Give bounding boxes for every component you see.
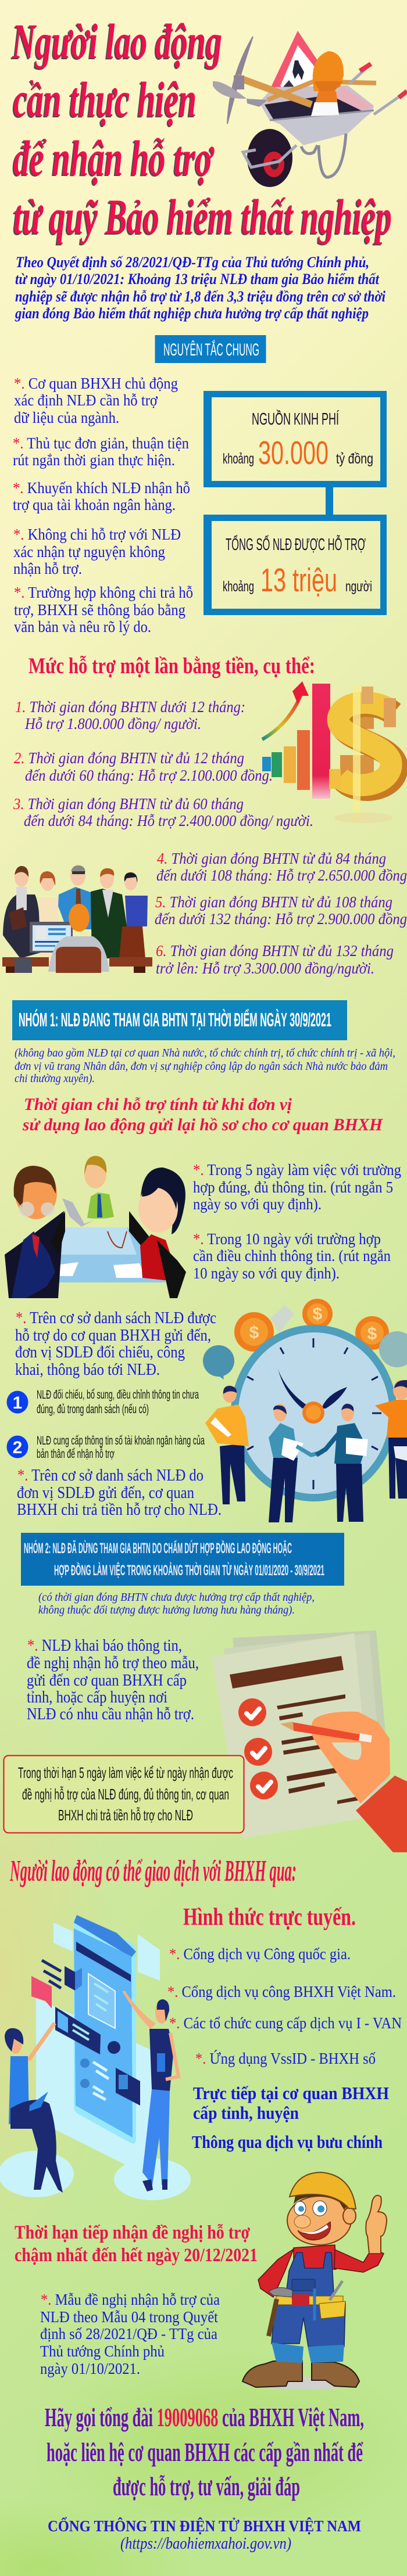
text: direct and postal channels: Trực tiếp tại cơ quan BHXH bbox=[193, 2083, 389, 2103]
text: worker declaration: *. NLĐ khai báo thông tin, bbox=[27, 1636, 182, 1655]
funding source figure: 30.000 bbox=[258, 434, 329, 472]
funding source figure: NGUỒN KINH PHÍ bbox=[252, 409, 340, 429]
note: group 1 exclusions: đơn vị vũ trang Nhân dân, đơn vị sự nghiệp công lập do ngân sách Nhà nước bảo đảm bbox=[15, 1060, 388, 1073]
illustration: checklist and hand bbox=[212, 1630, 407, 1852]
heading: support levels: Mức hỗ trợ một lần bằng tiền, cụ thể: bbox=[28, 653, 315, 678]
list: processing time: ngày so với quy định). bbox=[193, 1195, 322, 1213]
heading: payment time: sử dụng lao động gửi lại hồ sơ cho cơ quan BHXH bbox=[22, 1115, 384, 1134]
list: processing time: 10 ngày so với quy định). bbox=[193, 1264, 340, 1282]
list: support levels 1-3: 1. Thời gian đóng BHTN dưới 12 tháng: bbox=[15, 698, 245, 716]
numbered step 2 bbox=[7, 1434, 205, 1461]
funding source figure: tỷ đồng bbox=[336, 451, 373, 467]
callout: five working days bbox=[3, 1755, 244, 1833]
beneficiaries figure bbox=[223, 534, 372, 599]
text: request form: NLĐ theo Mẫu 04 trong Quyết bbox=[40, 2308, 218, 2326]
list: support levels 1-3 bbox=[13, 698, 313, 829]
list: support levels 4-6: 5. Thời gian đóng BHTN từ đủ 108 tháng bbox=[155, 893, 392, 911]
title bbox=[12, 13, 392, 245]
note: group 1 exclusions: chi thường xuyên). bbox=[15, 1072, 95, 1085]
beneficiaries figure: người bbox=[345, 579, 372, 595]
call to action bbox=[45, 2402, 364, 2501]
illustration: phone app with users bbox=[0, 1915, 191, 2200]
text: request form bbox=[40, 2291, 220, 2377]
callout: five working days: Trong thời hạn 5 ngày làm việc kể từ ngày nhận được bbox=[18, 1764, 233, 1781]
text: BHXH payment: đơn vị SDLĐ gửi đến, cơ quan bbox=[17, 1483, 194, 1502]
list: online channels: *. Ứng dụng VssID - BHXH số bbox=[195, 2050, 376, 2067]
text: worker declaration: gửi đến cơ quan BHXH cấp bbox=[27, 1671, 187, 1690]
list: general principles: *. Không chi hỗ trợ với NLĐ bbox=[13, 526, 181, 543]
numbered step 1: 1 bbox=[13, 1393, 22, 1413]
text: employer review bbox=[15, 1309, 216, 1379]
list: general principles: xác nhận tự nguyện không bbox=[13, 543, 165, 561]
list: support levels 1-3: đến dưới 60 tháng: Hỗ trợ 2.100.000 đồng. bbox=[25, 767, 273, 784]
list: general principles: *. Thủ tục đơn giản, thuận tiện bbox=[13, 434, 189, 452]
text: worker declaration bbox=[27, 1636, 199, 1723]
heading: deadline bbox=[15, 2222, 258, 2266]
text: employer review: hỗ trợ do cơ quan BHXH gửi đến, bbox=[15, 1326, 211, 1345]
text: BHXH payment: BHXH chi trả tiền hỗ trợ cho NLĐ. bbox=[17, 1500, 222, 1519]
numbered step 1: NLĐ đối chiếu, bổ sung, điều chỉnh thông tin chưa bbox=[37, 1388, 199, 1402]
title: để nhận hỗ trợ bbox=[13, 130, 215, 186]
illustration: construction worker thumbs up bbox=[242, 2172, 387, 2390]
icon: wheelbarrow with tools bbox=[213, 31, 407, 187]
callout: five working days: BHXH chi trả tiền hỗ trợ cho NLĐ bbox=[58, 1806, 193, 1824]
list: general principles: xác định NLĐ cần hỗ trợ bbox=[14, 391, 158, 409]
footer: source: (https://baohiemxahoi.gov.vn) bbox=[120, 2535, 291, 2553]
numbered step 1: đúng, đủ trong danh sách (nếu có) bbox=[37, 1403, 149, 1416]
text: employer review: *. Trên cơ sở danh sách NLĐ được bbox=[16, 1309, 216, 1327]
text: worker declaration: đề nghị nhận hỗ trợ theo mẫu, bbox=[27, 1654, 199, 1672]
text: request form: Thủ tướng Chính phủ bbox=[40, 2343, 165, 2360]
beneficiaries figure: 13 triệu bbox=[260, 562, 337, 599]
list: support levels 1-3: 2. Thời gian đóng BHTN từ đủ 12 tháng bbox=[14, 749, 244, 767]
list: general principles: nhận hỗ trợ. bbox=[13, 560, 82, 577]
text: employer review: khai, thông báo tới NLĐ. bbox=[15, 1360, 160, 1379]
list: support levels 1-3: đến dưới 84 tháng: Hỗ trợ 2.400.000 đồng/ người. bbox=[24, 812, 313, 829]
heading: deadline: Thời hạn tiếp nhận đề nghị hỗ trợ bbox=[15, 2222, 251, 2243]
list: support levels 4-6: 4. Thời gian đóng BHTN từ đủ 84 tháng bbox=[157, 850, 386, 867]
heading: payment time bbox=[22, 1095, 384, 1134]
text: direct and postal channels bbox=[192, 2083, 389, 2152]
list: general principles: trợ qua tài khoản ngân hàng. bbox=[13, 496, 176, 513]
list: general principles: dữ liệu của ngành. bbox=[14, 409, 119, 426]
list: support levels 4-6: 6. Thời gian đóng BHTN từ đủ 132 tháng bbox=[156, 942, 394, 960]
text: worker declaration: tỉnh, hoặc cấp huyện nơi bbox=[27, 1688, 167, 1706]
list: support levels 4-6: trở lên: Hỗ trợ 3.300.000 đồng/người. bbox=[156, 960, 374, 977]
heading bar: group 1 bbox=[12, 1000, 347, 1040]
heading bar: group 2 bbox=[21, 1533, 344, 1586]
list: online channels bbox=[167, 1945, 402, 2067]
text: BHXH payment: *. Trên cơ sở danh sách NLĐ do bbox=[17, 1466, 204, 1485]
numbered step 1 bbox=[7, 1388, 199, 1416]
list: processing time: cần điều chỉnh thông tin. (rút ngắn bbox=[193, 1247, 391, 1264]
list: general principles: văn bản và nêu rõ lý do. bbox=[14, 618, 151, 635]
text: request form: định số 28/2021/QĐ - TTg của bbox=[40, 2325, 217, 2343]
note: group 1 exclusions bbox=[15, 1047, 395, 1085]
heading button: general principles bbox=[155, 335, 266, 363]
illustration: clock, coins and people: $ bbox=[313, 1305, 323, 1324]
text: BHXH payment bbox=[17, 1466, 222, 1519]
illustration: clock, coins and people bbox=[203, 1299, 407, 1522]
list: processing time: *. Trong 10 ngày với trường hợp bbox=[193, 1230, 381, 1248]
note: group 2 conditions bbox=[38, 1591, 315, 1616]
text: employer review: đơn vị SDLĐ đối chiếu, công bbox=[15, 1343, 185, 1361]
note: group 2 conditions: không thuộc đối tượng được hưởng lương hưu hàng tháng). bbox=[38, 1604, 295, 1616]
icon: growth chart and dollar sign bbox=[262, 681, 396, 823]
list: general principles: *. Cơ quan BHXH chủ động bbox=[14, 375, 178, 392]
heading button: general principles: NGUYÊN TẮC CHUNG bbox=[163, 340, 259, 360]
list: general principles bbox=[13, 375, 193, 635]
heading: online form: Hình thức trực tuyến. bbox=[183, 1904, 356, 1931]
illustration: office team at desk bbox=[2, 865, 152, 973]
title: cần thực hiện bbox=[13, 71, 197, 127]
numbered step 2: bản thân để nhận hỗ trợ bbox=[37, 1447, 115, 1461]
list: processing time bbox=[193, 1161, 401, 1282]
illustration: clock, coins and people: $ bbox=[249, 1323, 259, 1342]
illustration: meeting at table bbox=[5, 1156, 186, 1298]
numbered step 2: NLĐ cung cấp thông tin số tài khoản ngân hàng của bbox=[37, 1434, 205, 1447]
text: request form: *. Mẫu đề nghị nhận hỗ trợ của bbox=[41, 2291, 220, 2308]
list: support levels 1-3: 3. Thời gian đóng BHTN từ đủ 60 tháng bbox=[13, 795, 244, 813]
list: online channels: *. Cổng dịch vụ Công quốc gia. bbox=[169, 1945, 351, 1963]
list: support levels 1-3: Hỗ trợ 1.800.000 đồng/ người. bbox=[24, 715, 201, 732]
funding source figure bbox=[223, 409, 373, 472]
list: general principles: *. Khuyến khích NLĐ nhận hỗ bbox=[13, 479, 190, 497]
text: direct and postal channels: cấp tỉnh, huyện bbox=[193, 2103, 299, 2123]
heading: payment time: Thời gian chi hỗ trợ tính từ khi đơn vị bbox=[24, 1095, 292, 1114]
title: Người lao động bbox=[12, 13, 222, 69]
list: general principles: *. Trường hợp không chi trả hỗ bbox=[14, 584, 193, 601]
text: request form: ngày 01/10/2021. bbox=[40, 2360, 140, 2377]
numbered step 2: 2 bbox=[13, 1438, 22, 1457]
beneficiaries figure: khoảng bbox=[223, 579, 254, 595]
list: support levels 4-6 bbox=[155, 850, 407, 977]
text: worker declaration: NLĐ có nhu cầu nhận hỗ trợ. bbox=[27, 1705, 194, 1723]
heading: deadline: chậm nhất đến hết ngày 20/12/2021 bbox=[15, 2245, 258, 2266]
list: general principles: trợ, BHXH sẽ thông báo bằng bbox=[14, 601, 185, 619]
funding source figure: khoảng bbox=[223, 451, 254, 467]
footer: source bbox=[48, 2517, 361, 2553]
note: group 2 conditions: (có thời gian đóng BHTN chưa được hưởng trợ cấp thất nghiệp, bbox=[38, 1591, 315, 1604]
callout: five working days: đề nghị hỗ trợ của NLĐ đúng, đủ thông tin, cơ quan bbox=[22, 1785, 229, 1803]
list: general principles: rút ngắn thời gian thực hiện. bbox=[13, 451, 175, 469]
panel: funding and beneficiaries bbox=[204, 391, 387, 615]
footer: source: CỔNG THÔNG TIN ĐIỆN TỬ BHXH VIỆT NAM bbox=[48, 2517, 361, 2535]
illustration: clock, coins and people: $ bbox=[367, 1324, 377, 1343]
intro paragraph bbox=[15, 254, 386, 322]
list: processing time: hợp đúng, đủ thông tin. (rút ngắn 5 bbox=[193, 1179, 393, 1196]
